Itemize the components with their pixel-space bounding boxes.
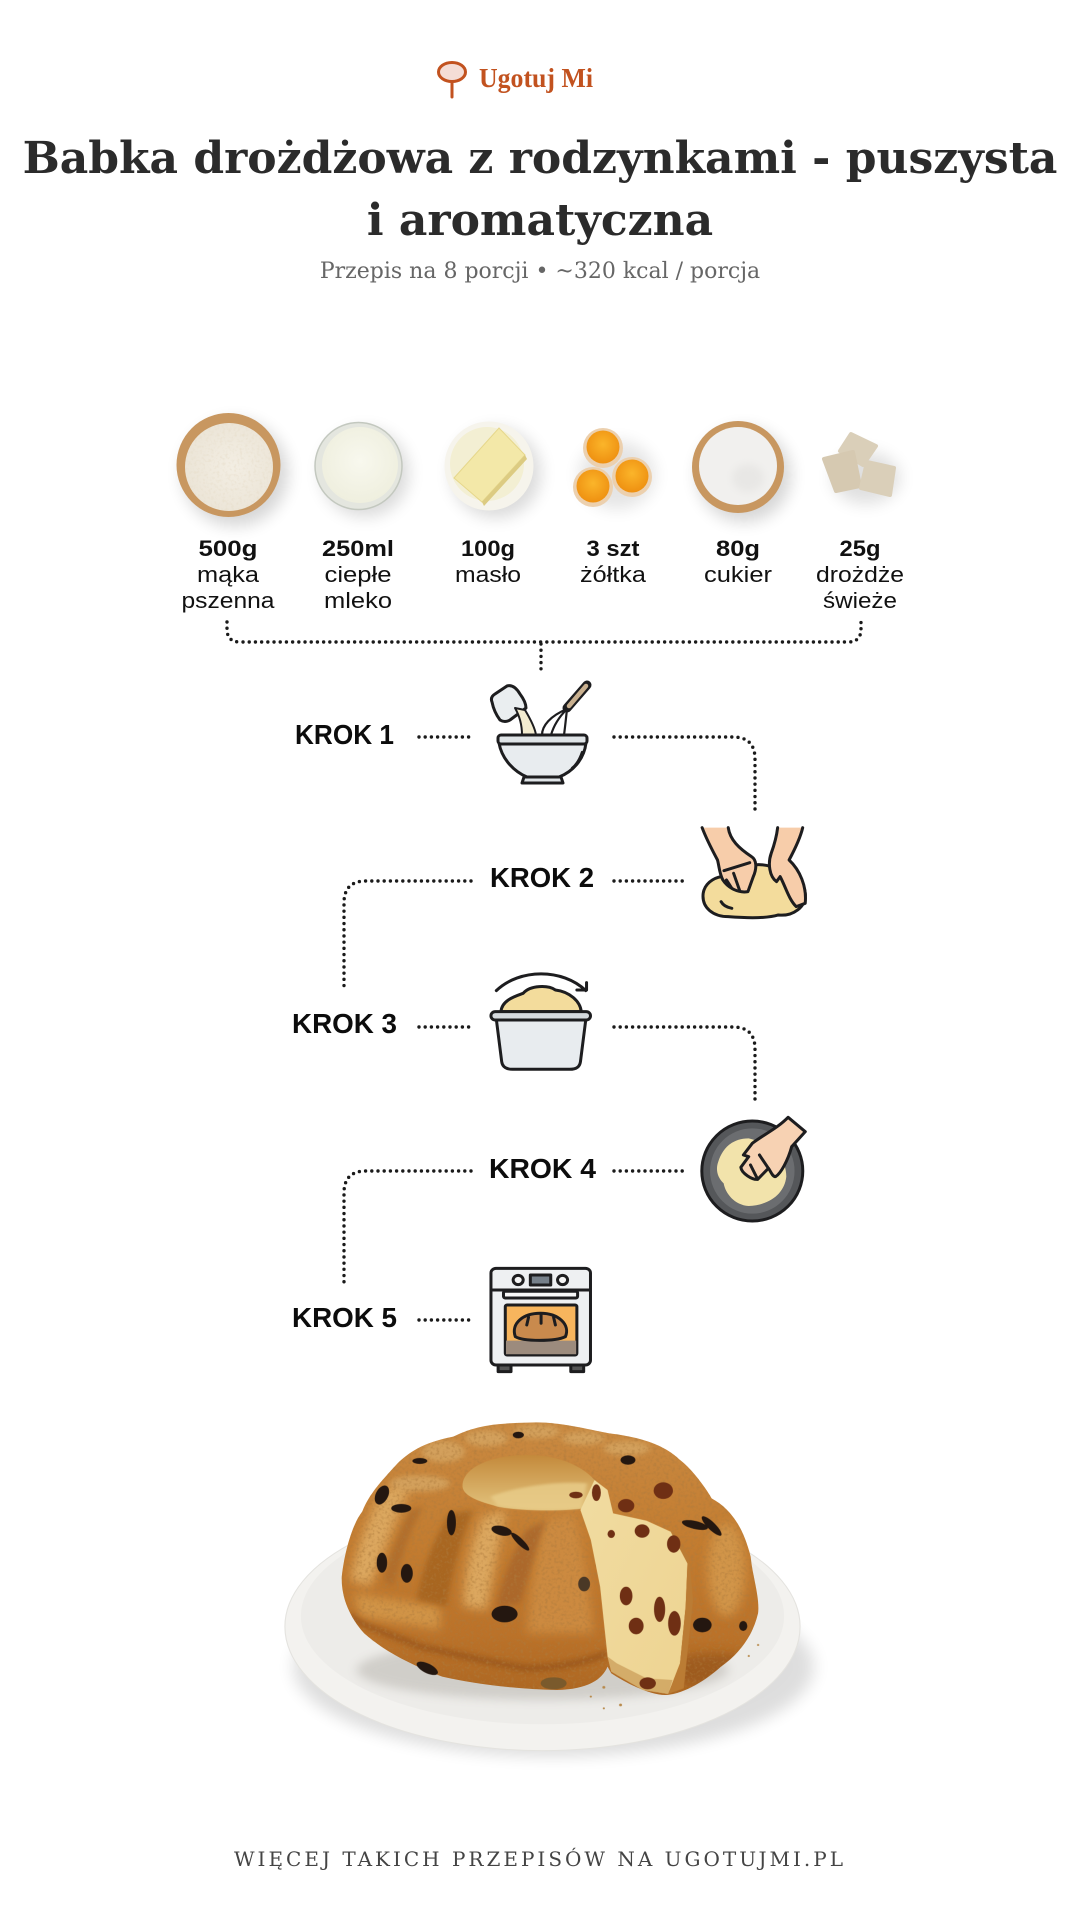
step label: KROK 4 — [489, 1153, 596, 1184]
ingredient photo: butter — [444, 422, 541, 518]
ingredient label: butter: 100g — [461, 536, 515, 561]
ingredient label: yeast: 25g — [840, 536, 880, 561]
ingredient label: milk: 250ml — [322, 536, 394, 561]
ingredient label: sugar: cukier — [704, 562, 772, 587]
ingredient label: sugar: 80g — [716, 536, 760, 561]
cut crumb — [580, 1480, 687, 1694]
step 1 — [295, 685, 755, 810]
top ridge highlights — [390, 1425, 650, 1491]
connector dots — [614, 879, 684, 883]
ingredients row — [176, 413, 904, 613]
step label: KROK 2 — [490, 862, 594, 893]
step label: KROK 5 — [292, 1302, 397, 1333]
cake shadow — [357, 1640, 728, 1700]
connector dots — [614, 737, 755, 810]
icon: mixing bowl with whisk — [491, 685, 587, 783]
bundt cake — [334, 1417, 766, 1709]
step 5 — [292, 1268, 590, 1372]
plate — [285, 1503, 800, 1751]
connector dots — [344, 881, 471, 991]
subtitle: Przepis na 8 porcji • ~320 kcal / porcja — [320, 259, 760, 284]
plate shadow — [293, 1577, 814, 1757]
icon: spoon logo — [438, 62, 466, 97]
arrow: ingredients bracket — [227, 622, 861, 669]
connector dots — [419, 1025, 471, 1029]
icon: shaping dough in tin — [702, 1117, 805, 1221]
crumbs on plate — [590, 1644, 759, 1709]
ingredient photo: sugar — [692, 421, 791, 522]
ingredient label: yeast: świeże — [823, 588, 897, 613]
step 4 — [344, 1117, 805, 1283]
icon: rising dough in pan — [491, 974, 590, 1069]
ingredient label: yolks: 3 szt — [586, 536, 640, 561]
icon: oven with loaf — [491, 1268, 590, 1372]
flute highlights — [350, 1480, 593, 1633]
step 2 — [344, 828, 805, 991]
ingredient photo: flour — [176, 413, 288, 526]
ingredient photo: milk — [315, 422, 409, 517]
footer: WIĘCEJ TAKICH PRZEPISÓW NA UGOTUJMI.PL — [234, 1846, 846, 1871]
ingredient label: flour: pszenna — [182, 588, 275, 613]
connector dots — [614, 1027, 755, 1103]
step label: KROK 3 — [292, 1008, 397, 1039]
ingredient photo: egg yolks — [573, 428, 655, 509]
ingredient label: butter: masło — [455, 562, 521, 587]
step label: KROK 1 — [295, 719, 394, 750]
ingredient label: milk: mleko — [324, 588, 392, 613]
ingredient label: flour: 500g — [198, 536, 258, 561]
connector dots — [344, 1171, 471, 1283]
ingredient label: yolks: żółtka — [580, 562, 647, 587]
ingredient photo: fresh yeast — [824, 434, 900, 504]
title: Babka drożdżowa z rodzynkami - puszysta — [23, 133, 1057, 184]
flute shadows — [383, 1507, 547, 1607]
logo wordmark: Ugotuj Mi — [479, 63, 593, 93]
ingredient label: flour: mąka — [197, 562, 260, 587]
connector dots — [614, 1169, 684, 1173]
connector dots — [419, 735, 471, 739]
cake photo — [285, 1417, 814, 1757]
cake hole — [462, 1455, 595, 1510]
title: i aromatyczna — [367, 195, 713, 246]
step 3 — [292, 974, 755, 1103]
icon: hands kneading dough — [702, 828, 805, 918]
raisins — [372, 1432, 747, 1689]
connector dots — [419, 1318, 471, 1322]
ingredient label: milk: ciepłe — [324, 562, 392, 587]
bottom band shadow — [350, 1615, 607, 1668]
ingredient label: yeast: drożdże — [816, 562, 904, 587]
logo — [438, 62, 593, 97]
